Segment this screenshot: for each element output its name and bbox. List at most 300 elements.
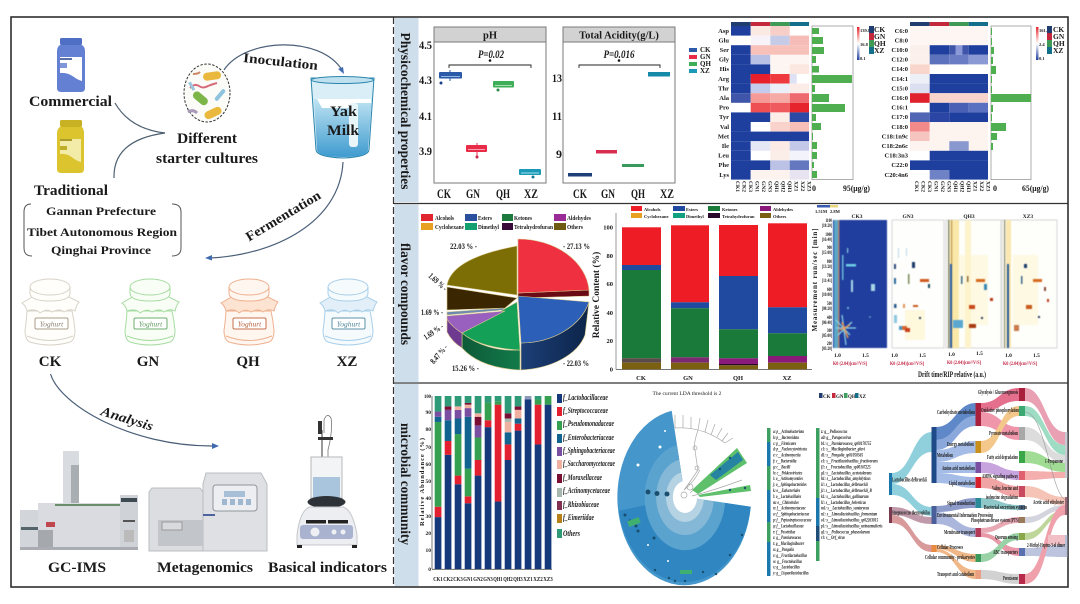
chart: LEfSe cladogram: [617, 411, 751, 585]
labels: analysis methods: GC-IMS: [48, 560, 106, 576]
legend: microbial families: f_Eimeriidae: [563, 512, 594, 522]
chart: GC-IMS topographic plots: Measurement run/sec [min]: [811, 228, 819, 332]
chart: fatty acid heatmap: C18:0: [891, 124, 908, 131]
label: Different starter cultures: [156, 131, 258, 167]
chart: pH boxplot: P=0.02: [478, 49, 504, 61]
sankey labels: Energy metabolism: [947, 441, 974, 448]
chart: amino acid heatmap: Asp: [718, 28, 729, 35]
legend: stacked bars: Esters: [686, 207, 698, 212]
legend: amino acid heatmap: [857, 25, 886, 61]
chart: fatty acid heatmap: C6:0: [895, 28, 908, 35]
sankey labels: Fatty acid degradation: [987, 454, 1018, 461]
y axis: [05:00]: [822, 332, 832, 338]
x axis labels: 1.5: [1033, 353, 1040, 359]
label: Yak Milk: Yak: [330, 104, 358, 120]
chart: fatty acid heatmap: XZ2: [978, 181, 984, 192]
chart: microbial relative abundance stacked bars: 30: [426, 514, 431, 520]
legend: taxa column 2: m1: s__Lactobacillus_suntoryeus: [821, 505, 869, 511]
chart: 3D pie of flavor compounds: [447, 239, 589, 370]
QH panel: [946, 220, 1001, 348]
chart: pH boxplot: 3.9: [419, 144, 432, 158]
chart: microbial relative abundance stacked bars: 40: [426, 496, 431, 502]
chart: fatty acid heatmap: C14:1: [891, 76, 908, 83]
sankey labels: Carbohydrate metabolism: [937, 409, 975, 416]
chart: fatty acid heatmap: C14:0: [891, 66, 908, 73]
y axis: 700: [827, 272, 832, 278]
chart: flavor stacked bars: 40: [606, 310, 613, 317]
labels: sample groups: GN: [137, 354, 159, 370]
chart: pH boxplot: GN: [466, 186, 480, 201]
ribbons: pathway to sub-pathway: [981, 388, 1019, 584]
chart: microbial relative abundance stacked bars: 70: [426, 445, 431, 451]
title: LDA threshold: The current LDA threshold is 2: [653, 391, 722, 397]
y axis: 900: [827, 244, 832, 250]
legend: taxa column 1: b: p__Bacteroidota: [773, 434, 800, 440]
arrow: fermentation: [205, 162, 343, 260]
icon: metagenomics sequencer: [149, 473, 267, 551]
chart: microbial relative abundance stacked bars: XZ2: [533, 576, 543, 583]
chart: GC-IMS topographic plots: [811, 205, 1057, 379]
chart: amino acid heatmap: Ile: [722, 143, 729, 150]
legend: pie chart: Esters: [478, 215, 492, 222]
chart: fatty acid heatmap: GN1: [932, 181, 938, 192]
chart: fatty acid heatmap: XZ1: [972, 181, 978, 192]
labels: pie percentages: 8.47 % -: [428, 342, 450, 366]
legend: cladogram groups: [819, 393, 867, 400]
chart: fatty acid content bars: [991, 26, 1049, 193]
label: Yak Milk: [327, 104, 360, 139]
chart: amino acid content bars: [812, 26, 870, 193]
legend: stacked bars: Cyclohexane: [644, 214, 668, 219]
labels: sample groups: CK: [39, 354, 62, 370]
x axis labels: QH3: [963, 214, 975, 220]
legend: pie chart: Tetrahydrofuran: [514, 224, 553, 231]
legend: stacked bars: Tetrahydrofuran: [722, 214, 755, 219]
chart: fatty acid content bars: 0: [993, 184, 997, 193]
sankey labels: Peroxisome: [1003, 575, 1018, 582]
icon: GC-IMS instrument: [20, 451, 138, 550]
legend: taxa column 1: e: c__Actinomycetia: [773, 452, 801, 458]
chart: fatty acid content bars: 65(μg/g): [1022, 184, 1049, 193]
legend: taxa column 1: o: f__Sphingobacteriaceae: [773, 511, 809, 517]
chart: microbial relative abundance stacked bars: Relative Abundance (%): [419, 438, 426, 526]
label: Inoculation: Inoculation: [242, 50, 319, 73]
chart: microbial relative abundance stacked bars: XZ3: [543, 576, 553, 583]
chart: amino acid heatmap: QH1: [773, 181, 779, 193]
chart: fatty acid heatmap: CK1: [913, 181, 919, 192]
legend: taxa column 1: r: f__Poxviridae: [773, 529, 795, 535]
sankey labels: Pyruvate metabolism: [989, 430, 1018, 437]
chart: flavor stacked bars: 0: [610, 366, 613, 374]
legend: taxa column 2: g1: s__Lactobacillus_acetotolerans: [820, 470, 872, 476]
legend: amino acid heatmap: CK: [874, 25, 885, 34]
chart: microbial relative abundance stacked bars: 0: [428, 567, 431, 573]
legend: cladogram groups: QH: [848, 395, 856, 400]
chart: amino acid heatmap: CK3: [747, 181, 753, 192]
labels: sample groups: [39, 354, 357, 370]
side label: physicochemical properties: [394, 18, 418, 202]
legend: pie chart: Aldehydes: [567, 215, 591, 222]
legend: cladogram groups: XZ: [859, 395, 867, 400]
chart: pH boxplot: QH: [496, 186, 510, 201]
chart: fatty acid heatmap: C8:0: [895, 38, 908, 44]
text: regions list: [27, 204, 177, 257]
y axis: [13:20]: [822, 263, 832, 269]
chart: total acidity boxplot: [552, 27, 675, 201]
legend: taxa column 2: k1: s__Lactobacillus_gallinarum: [821, 493, 869, 499]
chart: fatty acid heatmap: QH1: [952, 181, 958, 193]
legend: taxa column 1: t: g__Muciloginibacter: [773, 540, 804, 546]
chart: GC-IMS topographic plots: K0 (2.04)[cm²/V/S]: [947, 359, 981, 366]
legend: stacked bars: Alcohols: [644, 207, 661, 212]
labels: pie percentages: 1.69 % -: [421, 321, 445, 342]
chart: fatty acid heatmap: C18:2n6c: [882, 143, 908, 150]
GN panel: [892, 220, 944, 348]
sankey labels: AMPK signaling pathway: [982, 473, 1018, 480]
chart: amino acid heatmap: Lys: [719, 172, 729, 179]
chart: total acidity boxplot: P=0.016: [604, 49, 635, 61]
chart: amino acid heatmap: Ala: [719, 95, 730, 102]
legend: stacked bars: Aldehydes: [773, 207, 793, 212]
label: Different starter cultures: Different: [177, 131, 237, 147]
chart: amino acid heatmap: Thr: [718, 86, 729, 92]
icon: traditional starter bottle: [57, 120, 84, 173]
chart: flavor stacked bars: 60: [606, 281, 613, 288]
y axis: [03:20]: [822, 345, 832, 351]
side label: physicochemical properties: Physicochemical properties: [397, 32, 412, 190]
legend: boxplot groups: GN: [700, 53, 710, 61]
y axis: [10:00]: [822, 291, 832, 297]
labels: analysis methods: Metagenomics: [157, 560, 253, 576]
icon: yoghurt jar QH: Yoghurt: [238, 320, 262, 328]
icon: bacteria circle: [184, 64, 230, 122]
color scale and labels: 1.51M: [815, 209, 828, 214]
legend: taxa column 2: b1: s__Paeniarosacea_sp00170755: [821, 440, 872, 446]
chart: flavor stacked bars: 80: [606, 253, 613, 260]
chart: microbial relative abundance stacked bars: CK1: [433, 576, 443, 583]
chart: microbial relative abundance stacked bars: 90: [426, 410, 431, 416]
chart: pH boxplot: [419, 27, 546, 201]
chart: fatty acid heatmap: C18:1n9c: [882, 134, 908, 140]
labels: pie percentages: - 22.03 %: [563, 358, 589, 368]
side label: flavor compounds: [394, 204, 418, 382]
chart: microbial relative abundance stacked bars: 50: [426, 479, 431, 485]
chart: amino acid heatmap: Tyr: [719, 114, 729, 121]
chart: fatty acid heatmap: CK2: [920, 181, 926, 192]
icon: yoghurt jar XZ: [320, 279, 377, 345]
labels: pie percentages: 15.26 % -: [452, 363, 479, 373]
labels: analysis methods: Basical indicators: [268, 560, 387, 576]
legend: taxa column 1: [767, 428, 812, 576]
y axis: 200: [827, 340, 832, 346]
arrow: inoculation: [224, 45, 344, 74]
chart: amino acid heatmap: Glu: [719, 38, 729, 44]
x axis labels: 1.0: [948, 352, 955, 358]
sankey labels: Amino acid metabolism: [942, 465, 975, 472]
legend: taxa column 1: a: p__Actinobacteriota: [773, 428, 805, 434]
sankey labels: 1-Propanone: [1045, 458, 1063, 465]
chart: microbial relative abundance stacked bars: QH1: [493, 576, 503, 583]
chart: total acidity boxplot: 11: [552, 109, 562, 123]
chart: microbial relative abundance stacked bars: [419, 394, 553, 583]
ribbons: species to pathway class: [892, 432, 932, 552]
chart: fatty acid heatmap: C12:0: [891, 56, 908, 64]
legend: boxplot groups: XZ: [700, 67, 710, 75]
chart: microbial relative abundance stacked bars: 100: [424, 394, 431, 400]
legend: fatty acid heatmap: 161.4: [1039, 28, 1050, 33]
sankey labels: Streptococcus thermophilus: [892, 510, 930, 516]
legend: microbial families: f_Moraxellaceae: [563, 472, 602, 482]
legend: taxa column 2: d1: s__Pongolia_sp01058565: [821, 452, 864, 458]
legend: microbial families: [557, 392, 615, 538]
sankey labels: Cellular community - prokaryotes: [925, 554, 975, 561]
chart: amino acid heatmap: CK2: [740, 181, 746, 192]
chart: flavor stacked bars: [591, 213, 812, 382]
chart: pH boxplot: pH: [483, 30, 497, 42]
chart: amino acid content bars: 0: [812, 184, 816, 193]
legend: taxa column 1: p: f__Peptostreptococcaceae: [772, 517, 812, 523]
chart: fatty acid heatmap: C16:0: [891, 95, 908, 102]
legend: taxa column 1: u: g__Pongolia: [773, 546, 795, 552]
legend: taxa column 2: n1: s__Limosilactobacillus_fermentum: [821, 511, 878, 517]
legend: taxa column 1: l: o__Lactobacillales: [773, 493, 801, 499]
legend: taxa column 2: a0: g__Parapoxvirus: [821, 434, 851, 440]
legend: pie chart: Alcohols: [435, 215, 454, 222]
ribbons: pathway class to pathway: [936, 403, 976, 579]
chart: fatty acid heatmap: GN3: [946, 181, 952, 192]
chart: microbial relative abundance stacked bars: GN3: [483, 576, 493, 583]
legend: taxa column 1: w: g__Fructobacillus: [773, 558, 802, 564]
legend: microbial families: f_Streptococcaceae: [563, 405, 608, 415]
y axis: [06:40]: [822, 319, 832, 325]
legend: taxa column 1: c: p__Firmicutes: [773, 440, 796, 446]
side label: flavor compounds: flavor compounds: [397, 243, 412, 346]
labels: sample groups: QH: [236, 354, 260, 370]
icon: yoghurt jar CK: Yoghurt: [40, 320, 64, 328]
legend: microbial families: f_Lactobacillaceae: [563, 392, 608, 402]
legend: taxa column 1: i: o__Actinomycetales: [773, 475, 803, 481]
chart: fatty acid heatmap: CK3: [926, 181, 932, 192]
chart: amino acid heatmap: Val: [720, 124, 729, 131]
x axis labels: 1.0: [1005, 353, 1012, 359]
legend: taxa column 1: k: o__Eubacteriales: [773, 487, 800, 493]
label: Fermentation: Fermentation: [243, 187, 324, 244]
text: regions list: Gannan Prefecture: [46, 204, 157, 218]
arrow: analysis: [50, 374, 219, 449]
chart: amino acid heatmap: XZ1: [792, 181, 798, 192]
legend: pie chart: Ketones: [514, 215, 532, 222]
legend: stacked bars: [631, 206, 793, 219]
labels: sample groups: XZ: [337, 354, 357, 370]
legend: boxplot groups: CK: [700, 46, 711, 54]
legend: amino acid heatmap: 139.8: [860, 28, 871, 33]
chart: fatty acid heatmap: C18:3n3: [885, 152, 909, 160]
legend: amino acid heatmap: XZ: [874, 46, 884, 55]
y axis: [15:00]: [822, 249, 832, 255]
legend: pie chart: Dimethyl: [478, 224, 499, 231]
chart: pH boxplot: 4.1: [419, 109, 432, 123]
icon: yoghurt jar GN: [122, 279, 179, 345]
sankey labels: Lipid metabolism: [949, 480, 975, 487]
legend: taxa column 1: f: c__Bacteroidia: [773, 458, 797, 464]
legend: amino acid heatmap: 0.1: [860, 56, 866, 61]
legend: taxa column 2: c1: s__Muciloginibacter_gluvi: [821, 446, 866, 452]
chart: fatty acid heatmap: QH2: [958, 181, 964, 193]
label: Yak Milk: Milk: [327, 123, 360, 139]
chart: amino acid heatmap: GN2: [760, 181, 766, 192]
sankey labels: Transport and catabolism: [937, 571, 974, 578]
chart: amino acid content bars: 95(μg/g): [843, 184, 870, 193]
chart: amino acid heatmap: XZ2: [799, 181, 805, 192]
legend: taxa column 1: m: o__Chitovirales: [773, 499, 799, 505]
legend: taxa column 2: e1: s__Fructilactobacillus_fructivorans: [821, 458, 878, 464]
legend: taxa column 2: j1: s__Lactobacillus_delbrueckii_B: [820, 487, 872, 493]
chart: GC-IMS topographic plots: K0 (2.04)[cm²/V/S]: [890, 360, 924, 367]
legend: cladogram groups: CK: [823, 395, 831, 400]
sankey labels: Lactobacillus delbrueckii: [892, 476, 927, 484]
chart: amino acid heatmap: Phe: [719, 162, 729, 169]
chart: fatty acid heatmap: C10:0: [891, 47, 908, 54]
arrow: commercial to cultures: [115, 103, 165, 133]
legend: taxa column 2: [816, 428, 883, 561]
legend: taxa column 2: z: g__Pediococcus: [820, 428, 848, 434]
icon: yoghurt jar QH: [221, 279, 278, 345]
legend: pie chart: Cyclohexane: [435, 224, 464, 231]
legend: microbial families: f_Enterobacteriaceae: [563, 432, 614, 442]
legend: fatty acid heatmap: 0.1: [1039, 56, 1045, 61]
x axis labels: XZ3: [1023, 214, 1033, 220]
chart: amino acid heatmap: XZ3: [806, 181, 812, 192]
labels: pie percentages: 1.69 % -: [421, 307, 443, 317]
y axis: [08:20]: [822, 305, 832, 311]
legend: stacked bars: Dimethyl: [686, 214, 704, 219]
chart: amino acid heatmap: QH3: [786, 181, 792, 193]
chart: fatty acid heatmap: [882, 22, 990, 193]
chart: flavor stacked bars: 20: [606, 338, 613, 345]
text: regions list: Tibet Autonomous Region: [27, 225, 177, 239]
chart: amino acid heatmap: Arg: [718, 76, 730, 83]
y axis: 1000: [825, 231, 832, 237]
chart: fatty acid heatmap: XZ3: [984, 181, 990, 192]
chart: fatty acid heatmap: C17:0: [891, 114, 908, 121]
chart: microbial relative abundance stacked bars: CK2: [443, 576, 453, 583]
panel: experimental design workflow: [20, 38, 387, 576]
legend: taxa column 2: o1: s__Limosilactobacillus_sp02263015: [821, 517, 879, 523]
chart: GC-IMS topographic plots: K0 (2.04)[cm²/V/S]: [1003, 360, 1037, 367]
XZ panel: [1002, 220, 1057, 348]
tree branches: [675, 415, 742, 498]
ribbons: sub-pathway to compounds: [1025, 388, 1065, 584]
legend: taxa column 1: d: p__Nucleocytoviricota: [773, 446, 808, 452]
chart: amino acid heatmap: QH2: [780, 181, 786, 193]
chart: fatty acid heatmap: C20:4n6: [885, 172, 909, 179]
sankey labels: Bacterial secretion system: [984, 504, 1027, 511]
legend: stacked bars: Ketones: [722, 207, 738, 212]
chart: microbial relative abundance stacked bars: GN2: [473, 576, 483, 583]
x axis labels: 1.5: [976, 351, 983, 357]
arrow: traditional to cultures: [114, 133, 165, 178]
sankey nodes: [889, 388, 1068, 584]
icon: yoghurt jar CK: [22, 279, 79, 345]
legend: boxplot groups: QH: [700, 60, 711, 68]
chart: amino acid heatmap: [718, 22, 812, 193]
chart: amino acid heatmap: Met: [718, 134, 730, 140]
chart: fatty acid heatmap: C15:0: [891, 86, 908, 92]
legend: pie chart: Others: [567, 224, 583, 231]
chart: pH boxplot: 4.5: [419, 38, 432, 52]
y axis: 600: [827, 286, 832, 292]
legend: cladogram groups: GN: [836, 395, 844, 400]
chart: flavor stacked bars: 100: [603, 224, 613, 232]
sankey labels: [892, 389, 1065, 582]
legend: taxa column 2: l1: s__Lactobacillus_helveticus: [821, 499, 866, 505]
labels: pie percentages: 1.69 % -: [426, 271, 450, 293]
x axis labels: 1.5: [919, 353, 926, 359]
legend: fatty acid heatmap: CK: [1053, 25, 1064, 34]
legend: microbial families: f_Sphingobacteriaceae: [563, 445, 615, 455]
legend: microbial families: Others: [563, 528, 580, 538]
chart: flavor stacked bars: CK: [636, 375, 646, 382]
icon: yoghurt jar GN: Yoghurt: [139, 320, 163, 328]
chart: microbial relative abundance stacked bars: 60: [426, 462, 431, 468]
legend: boxplot groups: [689, 46, 711, 75]
icon: commercial starter bottle: [57, 38, 85, 92]
sankey labels: Quorum sensing: [995, 534, 1018, 541]
sankey labels: Metabolism: [937, 452, 953, 459]
chart: pH boxplot: XZ: [524, 186, 538, 201]
color scale and labels: [815, 205, 841, 214]
chart: fatty acid heatmap: GN2: [939, 181, 945, 192]
legend: taxa column 1: s: g__Paeniarosacea: [772, 534, 802, 540]
label: Commercial: Commercial: [29, 94, 112, 110]
chart: total acidity boxplot: GN: [601, 186, 615, 201]
legend: stacked bars: Others: [773, 214, 786, 219]
chart: total acidity boxplot: CK: [573, 186, 588, 201]
labels: analysis methods: [48, 560, 387, 576]
CK panel: [833, 220, 887, 348]
bracket: regions: [24, 204, 181, 256]
chart: flavor stacked bars: XZ: [782, 375, 792, 382]
sankey labels: Membrane transport: [944, 529, 975, 536]
legend: taxa column 2: p1: s__Limosilactobacillus_urinaemulieris: [820, 523, 883, 529]
chart: flavor stacked bars: GN: [683, 375, 693, 382]
color scale and labels: 2.8M: [830, 209, 841, 214]
dashed panel divider: [392, 17, 394, 587]
y axis: 500: [827, 300, 832, 306]
chart: GC-IMS topographic plots: K0 (2.04)[cm²/V/S]: [833, 360, 867, 367]
sankey labels: Valine, leucine and: [992, 485, 1018, 492]
chart: total acidity boxplot: Total Acidity(g/L): [579, 30, 659, 42]
legend: fatty acid heatmap: [1036, 25, 1065, 61]
highlighted clades: [692, 448, 747, 494]
legend: taxa column 1: j: o__Sphingobacteriales: [772, 481, 807, 487]
x axis labels: 1.0: [834, 353, 841, 359]
y axis: 300: [827, 327, 832, 333]
chart: fatty acid heatmap: C16:1: [891, 104, 908, 112]
legend: fatty acid heatmap: GN: [1053, 32, 1065, 41]
sankey labels: Oxidative phosphorylation: [981, 407, 1019, 414]
chart: total acidity boxplot: 13: [552, 71, 562, 85]
sankey labels: Environmental Information Processing: [937, 512, 993, 519]
chart: amino acid heatmap: GN1: [754, 181, 760, 192]
chart: microbial relative abundance stacked bars: 20: [426, 531, 431, 537]
legend: taxa column 1: y: g__Liquorilactobacillus: [772, 570, 809, 576]
chart: amino acid heatmap: His: [720, 66, 729, 73]
text: regions list: Qinghai Province: [51, 243, 152, 257]
legend: fatty acid heatmap: 2.4: [1039, 42, 1045, 47]
chart: microbial relative abundance stacked bars: XZ1: [523, 576, 533, 583]
y axis: [822, 217, 832, 351]
